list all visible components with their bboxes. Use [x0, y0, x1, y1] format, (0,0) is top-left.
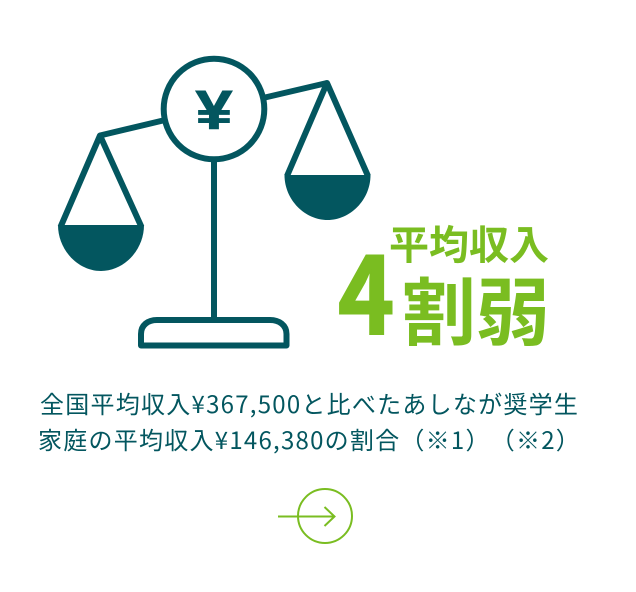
icon: arrow in circle [278, 489, 352, 543]
heading: 割弱: 割弱 [402, 254, 550, 361]
heading: average income: 平均収入 [389, 213, 549, 271]
stand and base [141, 160, 286, 346]
right pan [284, 83, 370, 220]
yen symbol: ¥ [196, 79, 232, 141]
description text [38, 385, 581, 456]
description text: 全国平均収入¥367,500と比べたあしなが奨学生 [40, 385, 579, 420]
left pan [58, 136, 144, 271]
description text: 家庭の平均収入¥146,380の割合（※1） （※2） [38, 421, 581, 456]
big number 4: 4 [338, 211, 394, 365]
beam and centre circle [100, 59, 327, 159]
